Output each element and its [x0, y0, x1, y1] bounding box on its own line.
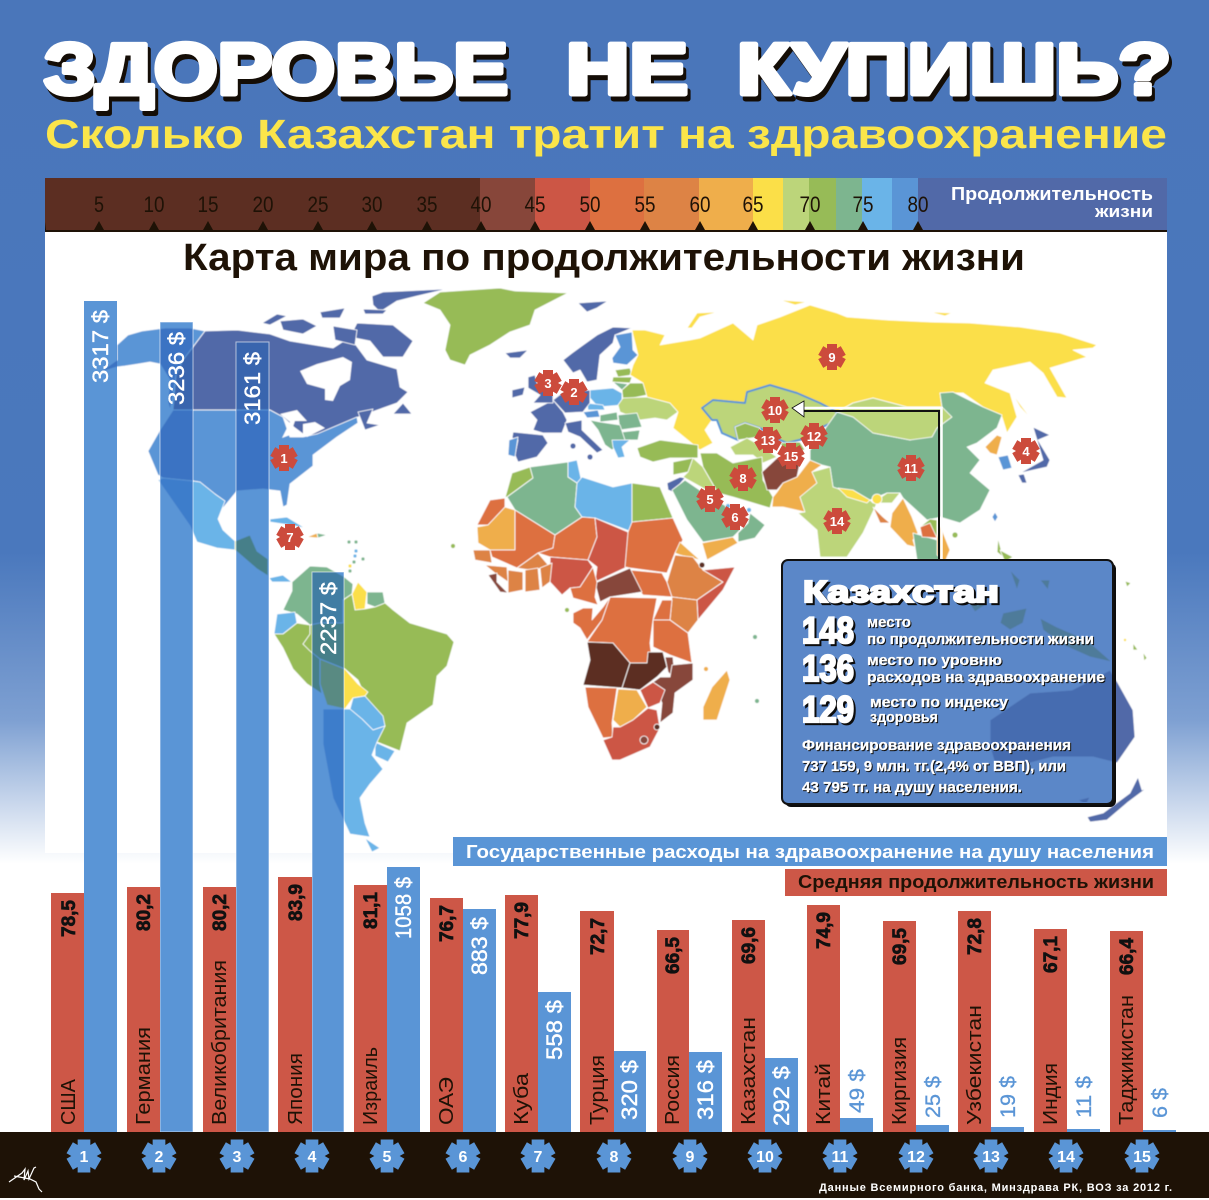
subtitle: Сколько Казахстан тратит на здравоохранение — [45, 111, 1167, 157]
map rank markers: 14 — [830, 514, 845, 529]
life expectancy colour scale: 25 — [308, 192, 328, 217]
spending values: 558 $ — [542, 1000, 567, 1060]
callout heading: Казахстан — [803, 574, 999, 609]
life expectancy colour scale: 10 — [144, 192, 164, 217]
spending values — [88, 310, 1172, 1126]
country names: Казахстан — [738, 1017, 760, 1125]
country names: Китай — [813, 1063, 835, 1125]
life expectancy values: 78,5 — [59, 900, 80, 937]
legend: average life expectancy: Средняя продолжительность жизни — [798, 872, 1154, 892]
red life expectancy bars — [51, 877, 1143, 1132]
europe — [505, 301, 705, 462]
country names: Киргизия — [889, 1037, 911, 1125]
life expectancy values: 76,7 — [437, 905, 458, 942]
rank stars: 13 — [982, 1149, 1000, 1166]
life expectancy colour scale: 20 — [252, 192, 274, 217]
map rank markers: 1 — [280, 451, 288, 466]
legend: average life expectancy — [785, 869, 1167, 896]
life expectancy colour scale: 35 — [416, 192, 438, 217]
south america — [269, 566, 454, 852]
life expectancy values: 69,5 — [890, 928, 911, 965]
arrow from Kazakhstan box to map — [792, 401, 942, 562]
rank: life expectancy — [802, 610, 1094, 651]
oceania and indonesia — [960, 550, 1147, 822]
spending values: 883 $ — [467, 917, 492, 975]
financing note — [802, 737, 1071, 796]
country names: Израиль — [360, 1047, 382, 1125]
country names: Япония — [285, 1053, 307, 1125]
rank: life expectancy: 148 — [802, 610, 854, 651]
country names: Узбекистан — [964, 1005, 986, 1125]
spending values: 6 $ — [1149, 1088, 1172, 1118]
country names: Турция — [587, 1055, 609, 1125]
title — [44, 30, 1171, 110]
life expectancy colour scale: 65 — [742, 192, 764, 217]
country names: Россия — [662, 1055, 684, 1125]
life expectancy colour scale — [45, 178, 1167, 232]
blue spending bars — [84, 301, 1176, 1132]
rank stars — [67, 1139, 1159, 1173]
financing note: Финансирование здравоохранения — [802, 737, 1071, 754]
financing note: 43 795 тг. на душу населения. — [802, 779, 1022, 796]
country names: Индия — [1040, 1063, 1062, 1125]
legend: state spending per capita: Государственные расходы на здравоохранение на душу населения — [466, 842, 1154, 862]
spending values: 49 $ — [846, 1069, 869, 1113]
life expectancy values: 72,8 — [965, 918, 986, 955]
map rank markers: 11 — [904, 461, 918, 476]
title: КУПИШЬ? — [737, 30, 1171, 110]
greenland — [423, 288, 568, 365]
life expectancy colour scale: 55 — [634, 192, 656, 217]
rank stars: 3 — [233, 1149, 242, 1166]
country names: США — [58, 1078, 80, 1125]
bottom rank band — [0, 1132, 1209, 1198]
rank: health spending: 136 — [802, 648, 854, 689]
life expectancy colour scale: 60 — [690, 192, 710, 217]
author signature — [9, 1167, 42, 1192]
rank stars: 2 — [155, 1149, 164, 1166]
rank: health index: 129 — [802, 689, 854, 730]
spending values: 2237 $ — [316, 582, 341, 655]
africa — [450, 460, 760, 760]
spending values: 316 $ — [693, 1060, 718, 1120]
rank stars: 15 — [1133, 1149, 1151, 1166]
life expectancy colour scale: 40 — [470, 192, 492, 217]
spending values: 3317 $ — [88, 310, 113, 383]
life expectancy values: 69,6 — [739, 927, 760, 964]
life expectancy colour scale: 45 — [524, 192, 546, 217]
life expectancy values: 67,1 — [1041, 936, 1062, 973]
legend: state spending per capita — [453, 837, 1167, 866]
rank: health spending: место по уровню — [867, 652, 1002, 669]
map rank markers: 6 — [731, 510, 739, 525]
life expectancy colour scale: жизни — [1094, 202, 1153, 221]
map rank markers: 7 — [286, 530, 294, 545]
life expectancy values: 80,2 — [134, 894, 155, 931]
country names: Германия — [133, 1027, 155, 1125]
life expectancy values: 77,9 — [512, 902, 533, 939]
map title: Карта мира по продолжительности жизни — [183, 237, 1025, 279]
life expectancy colour scale: 15 — [198, 192, 218, 217]
rank stars: 8 — [610, 1149, 619, 1166]
spending values: 19 $ — [997, 1076, 1020, 1118]
spending values: 1058 $ — [391, 877, 416, 939]
life expectancy colour scale: 75 — [852, 192, 874, 217]
spending values: 292 $ — [769, 1066, 794, 1126]
life expectancy colour scale: 5 — [94, 192, 104, 217]
spending values: 11 $ — [1073, 1076, 1096, 1118]
life expectancy colour scale: 50 — [580, 192, 600, 217]
map rank markers: 13 — [761, 433, 775, 448]
rank: health index — [802, 689, 1009, 730]
rank stars: 4 — [308, 1149, 317, 1166]
life expectancy values — [59, 884, 1138, 975]
life expectancy values: 83,9 — [286, 884, 307, 921]
rank stars: 7 — [534, 1149, 543, 1166]
map rank markers — [270, 344, 1040, 550]
map rank markers: 5 — [706, 492, 714, 507]
rank: health spending — [802, 648, 1105, 689]
life expectancy values: 81,1 — [361, 892, 382, 929]
country names: Великобритания — [209, 960, 231, 1125]
title: ЗДОРОВЬЕ — [44, 30, 508, 110]
asia — [630, 300, 1097, 562]
map rank markers: 2 — [570, 385, 578, 400]
life expectancy colour scale: Продолжительность — [951, 184, 1153, 204]
life expectancy values: 66,5 — [663, 937, 684, 974]
life expectancy values: 80,2 — [210, 894, 231, 931]
rank: health index: здоровья — [870, 709, 938, 726]
rank stars: 11 — [832, 1149, 849, 1166]
life expectancy values: 72,7 — [588, 918, 609, 955]
rank stars: 14 — [1057, 1149, 1075, 1166]
country names: ОАЭ — [436, 1077, 458, 1125]
source note: Данные Всемирного банка, Минздрава РК, ВОЗ за 2012 г. — [819, 1182, 1172, 1194]
life expectancy values: 74,9 — [814, 912, 835, 949]
rank stars: 12 — [907, 1149, 925, 1166]
rank stars: 6 — [459, 1149, 468, 1166]
spending values: 320 $ — [617, 1060, 642, 1120]
map rank markers: 8 — [739, 471, 747, 486]
north america — [100, 289, 447, 576]
map rank markers: 10 — [768, 403, 782, 418]
rank: life expectancy: место — [867, 614, 911, 631]
spending values: 25 $ — [922, 1076, 945, 1118]
rank stars: 5 — [383, 1149, 392, 1166]
rank stars: 1 — [80, 1149, 89, 1166]
rank: health spending: расходов на здравоохранение — [867, 669, 1105, 686]
map rank markers: 15 — [784, 449, 798, 464]
country names — [58, 960, 1138, 1125]
world map by life expectancy — [100, 288, 1147, 852]
life expectancy colour scale: 80 — [908, 192, 928, 217]
rank: health index: место по индексу — [870, 694, 1009, 711]
country names: Таджикистан — [1116, 995, 1138, 1125]
panel: world map background — [45, 232, 1167, 853]
title: НЕ — [566, 30, 688, 110]
rank: life expectancy: по продолжительности жизни — [867, 631, 1094, 648]
map rank markers: 12 — [807, 429, 821, 444]
life expectancy values: 66,4 — [1117, 938, 1138, 975]
country names: Куба — [511, 1072, 533, 1125]
life expectancy colour scale: 70 — [800, 192, 820, 217]
map rank markers: 9 — [828, 350, 836, 365]
rank stars: 10 — [756, 1149, 774, 1166]
life expectancy colour scale: 30 — [362, 192, 382, 217]
map rank markers: 4 — [1022, 444, 1030, 459]
financing note: 737 159, 9 млн. тг.(2,4% от ВВП), или — [802, 758, 1066, 775]
rank stars: 9 — [686, 1149, 695, 1166]
map rank markers: 3 — [544, 376, 552, 391]
spending values: 3161 $ — [240, 352, 265, 425]
callout: Kazakhstan — [781, 559, 1116, 807]
spending values: 3236 $ — [164, 332, 189, 405]
